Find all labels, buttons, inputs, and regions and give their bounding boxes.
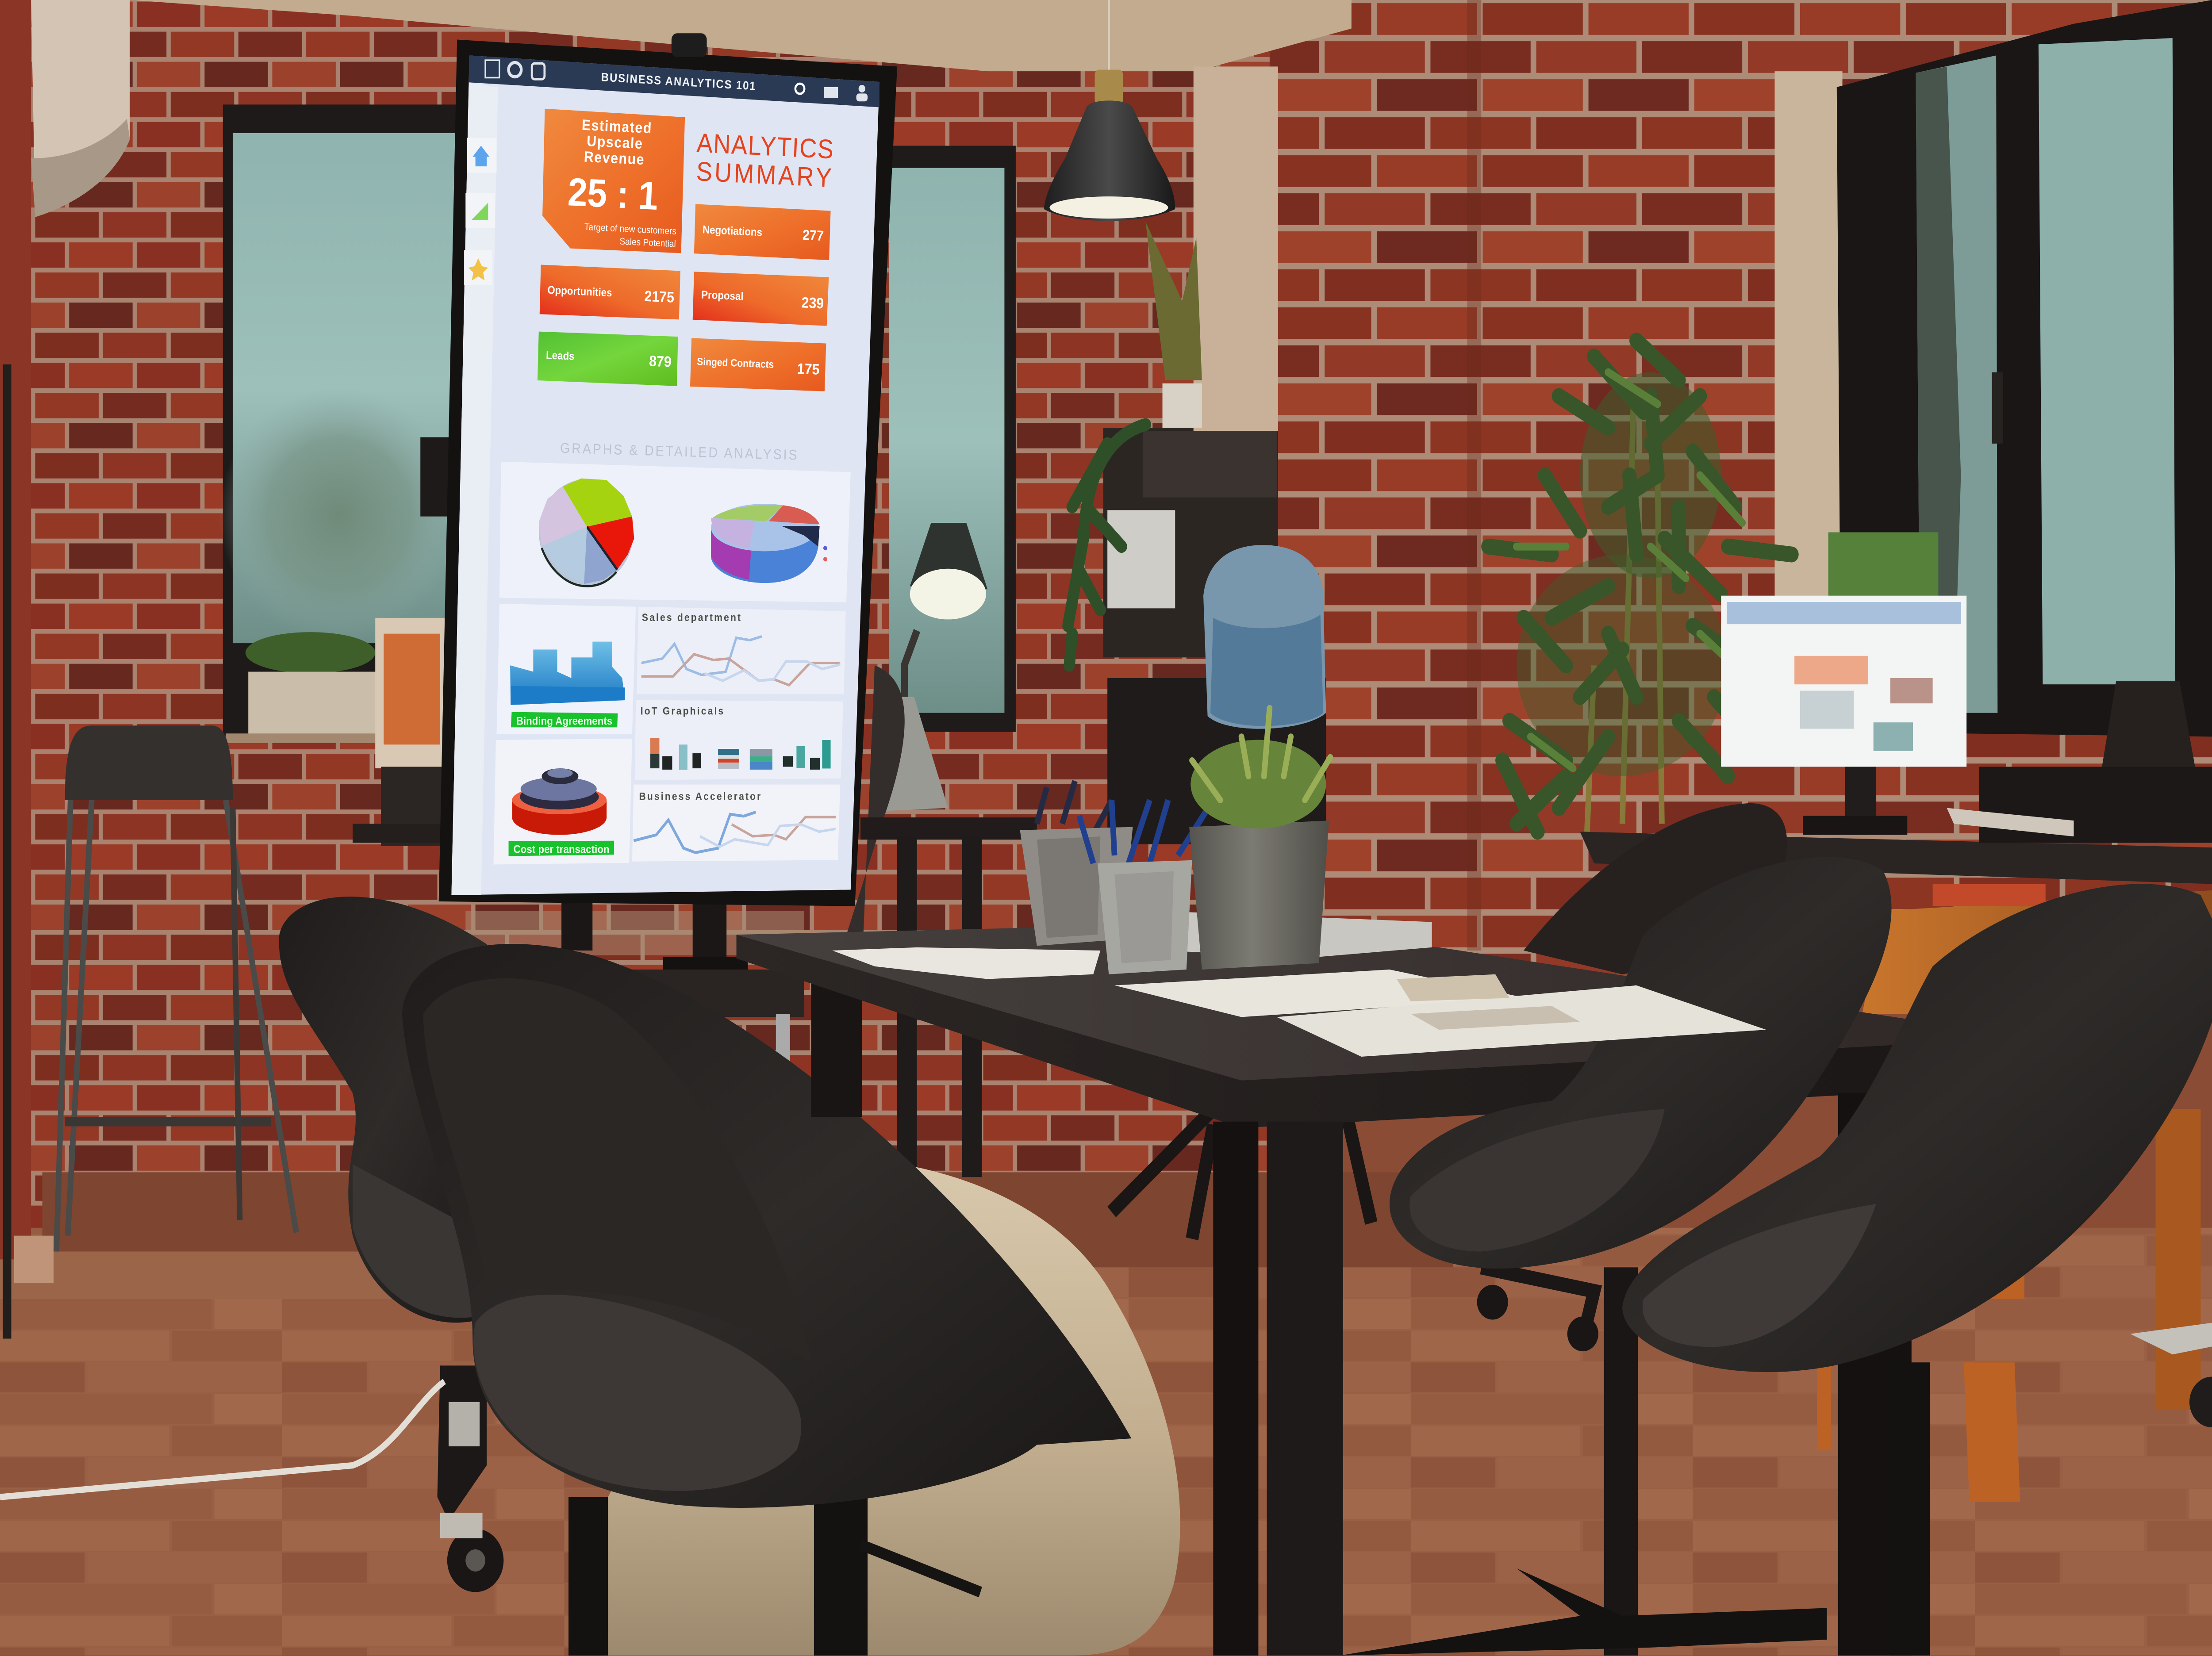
cart wheel at right edge (2130, 1323, 2212, 1427)
heading: analytics summary: SUMMARY (696, 157, 832, 193)
card: signed contracts: 175 (797, 360, 820, 378)
back monitor (1721, 596, 1966, 835)
chair base and caster (438, 1365, 503, 1592)
chair D (1390, 857, 1892, 1269)
hanging vine (1068, 425, 1145, 665)
water bottle (1203, 545, 1326, 729)
card: estimated upscale revenue: Revenue (584, 148, 645, 168)
left bar stool (57, 725, 296, 1251)
panel: pie charts (499, 462, 851, 602)
panel: business accelerator chart (632, 785, 840, 862)
card: leads: 879 (649, 353, 672, 370)
foreground chair (402, 944, 1131, 1656)
header bar (469, 55, 879, 107)
heading: analytics summary: ANALYTICS (696, 128, 834, 165)
panel: business accelerator chart: Business Accelerator (639, 791, 762, 802)
back desk and printer (1580, 681, 2212, 884)
sidebar icons (464, 138, 496, 285)
bamboo plant (1488, 341, 1792, 832)
notebook (832, 947, 1100, 979)
3D blue block chart (510, 642, 625, 705)
main table (737, 927, 2028, 1656)
card: opportunities: 2175 (644, 288, 675, 306)
laptop (1157, 911, 1432, 957)
left window (219, 104, 463, 741)
left brick pillar edge (0, 0, 54, 1338)
header icons (485, 60, 868, 101)
table top (737, 927, 2028, 1081)
card: opportunities (540, 264, 680, 319)
window right of screen (889, 146, 1016, 732)
potted plant (1189, 708, 1330, 970)
chair E (1622, 884, 2212, 1656)
chair shell (279, 897, 494, 1322)
bean bag (604, 1165, 1180, 1656)
screen bezel (439, 40, 897, 906)
mesh pencil cup (1020, 781, 1133, 946)
left pie chart (539, 479, 634, 586)
webcam (672, 33, 707, 57)
card: proposal: 239 (801, 294, 824, 312)
right window (1837, 0, 2212, 736)
table legs (1213, 1093, 1912, 1656)
shelf plant (1145, 222, 1202, 428)
air conditioner (31, 0, 130, 217)
beige pillar (1194, 66, 1278, 431)
card: estimated upscale revenue: Upscale (587, 132, 643, 152)
green label (511, 712, 618, 728)
chair shell (402, 944, 1131, 1508)
back chair behind table (1524, 803, 1787, 974)
background wall (0, 0, 2212, 1259)
card: signed contracts (690, 338, 826, 391)
analytics display screen (439, 33, 897, 906)
right 3D pie chart (711, 504, 827, 583)
power cable (0, 1381, 444, 1497)
glass pen cup (1079, 800, 1213, 974)
ceiling beam (130, 0, 1352, 71)
card: estimated upscale revenue (542, 109, 685, 253)
panel: IoT graphicals chart (635, 700, 843, 780)
card: negotiations: Negotiations (702, 224, 762, 239)
desk lamp behind screen (846, 523, 987, 935)
window planter behind monitor (1828, 532, 1938, 602)
small back monitor (353, 618, 451, 846)
panel: sales department chart (637, 607, 846, 694)
stacked disc chart (512, 768, 607, 835)
panel: binding agreements (496, 604, 636, 734)
green label: Binding Agreements (516, 715, 612, 728)
card: proposal: Proposal (701, 289, 744, 303)
table rear leg (811, 958, 862, 1117)
display background (451, 55, 879, 895)
left back chair (279, 897, 503, 1592)
background table (565, 817, 1037, 1177)
header title: BUSINESS ANALYTICS 101 (601, 71, 757, 93)
desk items (832, 708, 1766, 1057)
background chair legs (1112, 1109, 1371, 1239)
card: estimated upscale revenue: Target of new customers (584, 222, 676, 237)
right window recess (1774, 71, 1843, 744)
bookcase (1103, 428, 1326, 844)
card: negotiations (694, 204, 831, 260)
card: leads (538, 332, 678, 386)
paper sheets (1114, 970, 1766, 1057)
card: negotiations: 277 (802, 227, 824, 244)
card: estimated upscale revenue: Estimated (581, 116, 653, 137)
card: estimated upscale revenue: 25 : 1 (567, 169, 659, 218)
green label: Cost per transaction (514, 843, 610, 856)
chair seat (473, 1295, 801, 1491)
card: proposal (693, 272, 829, 326)
heading: analytics summary (695, 128, 834, 193)
card: estimated upscale revenue: Sales Potential (619, 236, 676, 249)
table front edge (737, 935, 2028, 1128)
chair D stem and base (1340, 1267, 1827, 1656)
pendant lamp (1044, 0, 1175, 221)
window sill planter (226, 632, 458, 743)
floor (0, 1172, 2212, 1656)
panel: sales department chart: Sales department (642, 612, 742, 623)
section title: GRAPHS & DETAILED ANALYSIS (560, 440, 797, 463)
screen stand (465, 903, 804, 970)
card: signed contracts: Singed Contracts (697, 356, 774, 370)
foosball table (1817, 884, 2212, 1502)
wall mount arm (420, 437, 449, 517)
chair stems (568, 1497, 980, 1656)
panel: cost per transaction (493, 739, 632, 865)
card: leads: Leads (546, 349, 575, 363)
panel: IoT graphicals chart: IoT Graphicals (641, 705, 725, 717)
card: opportunities: Opportunities (547, 284, 612, 299)
sidebar (451, 82, 498, 895)
